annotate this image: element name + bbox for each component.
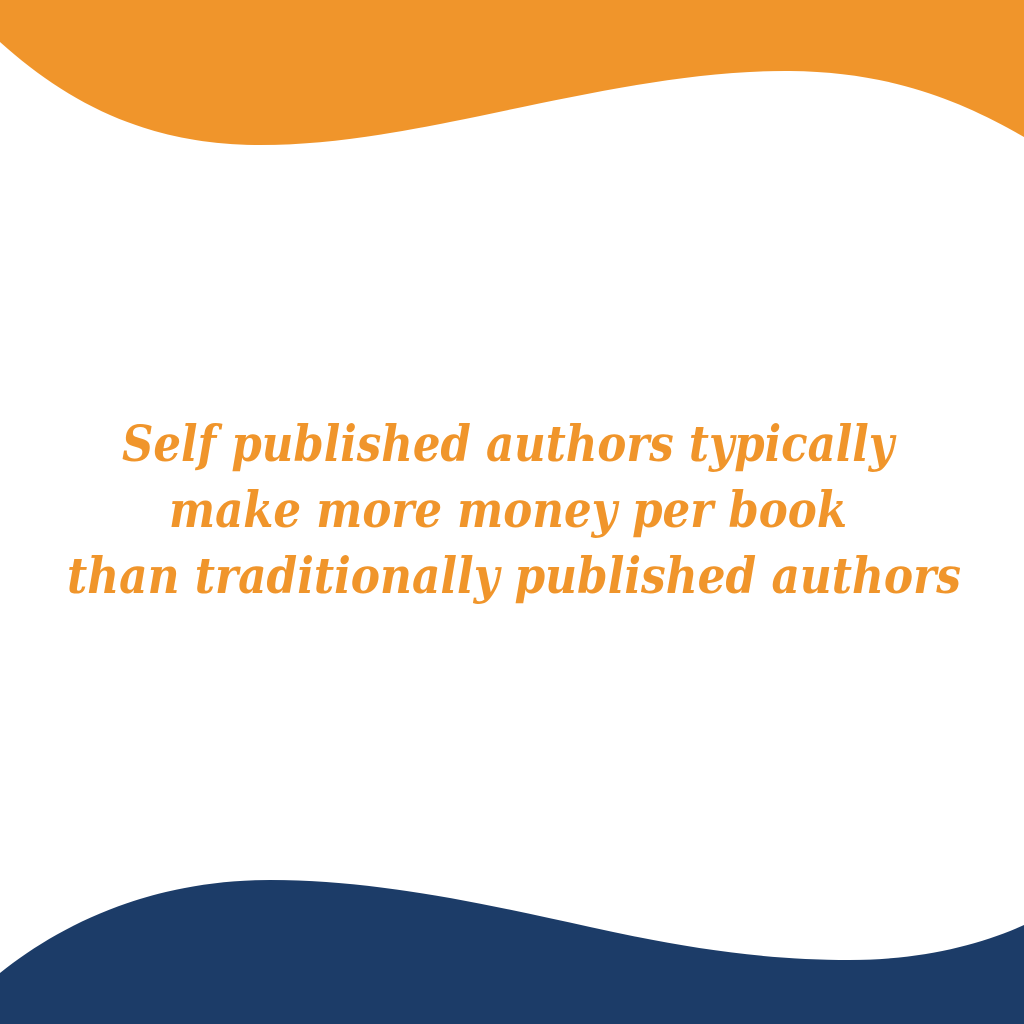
main statement text: [67, 414, 961, 605]
main statement text: make more money per book: [169, 480, 847, 539]
main statement text: Self published authors typically: [122, 414, 897, 473]
top orange wave: [0, 0, 1024, 145]
bottom navy wave: [0, 880, 1024, 1024]
